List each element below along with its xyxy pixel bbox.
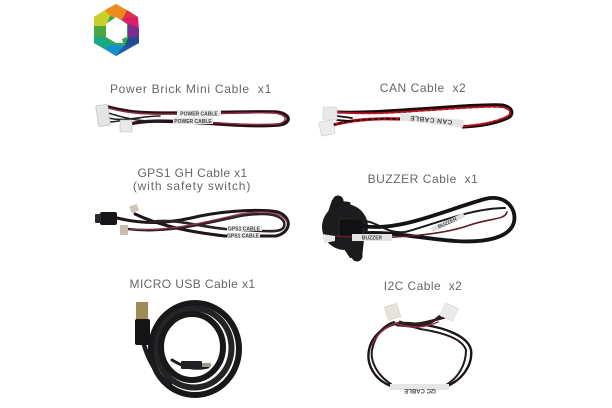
cable: BUZZER: BUZZER bbox=[437, 216, 458, 230]
heading: Power Brick Mini Cable: Power Brick Mini Cable x1 bbox=[110, 82, 272, 96]
cable: I2C bbox=[368, 303, 471, 393]
cable: I2C: I2C CABLE bbox=[404, 387, 436, 393]
cable: Power Brick Mini: POWER CABLE bbox=[180, 112, 218, 118]
cable: GPS1 GH with safety switch: GPS1 CABLE bbox=[228, 226, 261, 232]
heading: CAN Cable: CAN Cable x2 bbox=[380, 81, 466, 95]
cable: CAN bbox=[319, 105, 512, 136]
cable: BUZZER bbox=[322, 196, 514, 262]
cable: GPS1 GH with safety switch: GPS1 CABLE bbox=[227, 234, 260, 240]
heading: MICRO USB Cable: MICRO USB Cable x1 bbox=[130, 277, 255, 291]
cable: Power Brick Mini: POWER CABLE bbox=[174, 119, 212, 125]
heading: I2C Cable: I2C Cable x2 bbox=[384, 279, 462, 293]
cable: CAN: CAN CABLE bbox=[409, 114, 453, 125]
icon: hexagon logo bbox=[94, 4, 139, 56]
heading: BUZZER Cable: BUZZER Cable x1 bbox=[368, 172, 478, 186]
cable: GPS1 GH with safety switch bbox=[95, 204, 288, 240]
cable: Power Brick Mini bbox=[96, 104, 288, 132]
cable: BUZZER: BUZZER bbox=[362, 236, 383, 242]
cable: MICRO USB coil bbox=[135, 302, 239, 395]
subheading: with safety switch: (with safety switch) bbox=[133, 179, 251, 193]
heading: GPS1 GH Cable: GPS1 GH Cable x1 bbox=[137, 166, 248, 180]
